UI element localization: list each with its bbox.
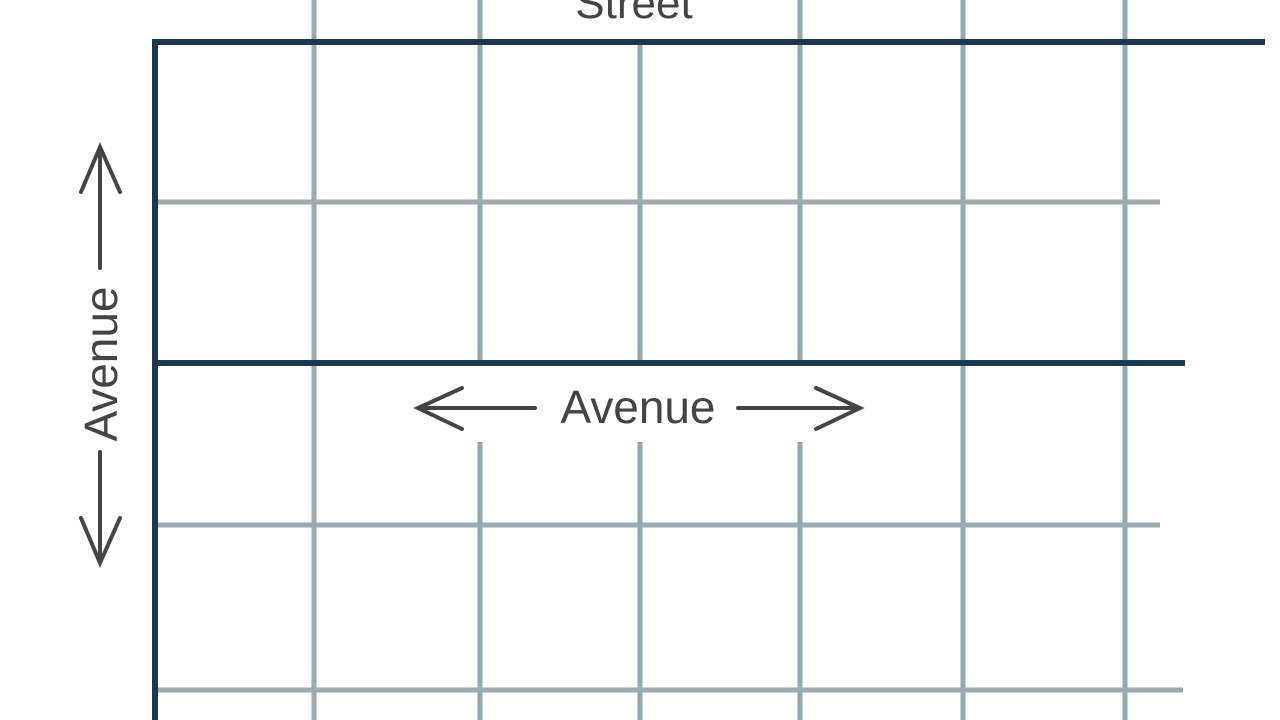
label: vertical Avenue with arrows: Avenue (75, 286, 127, 442)
label: horizontal Avenue with arrows: Avenue (560, 381, 716, 433)
label: vertical Avenue with arrows (75, 147, 127, 563)
label: horizontal Avenue with arrows (418, 381, 860, 433)
